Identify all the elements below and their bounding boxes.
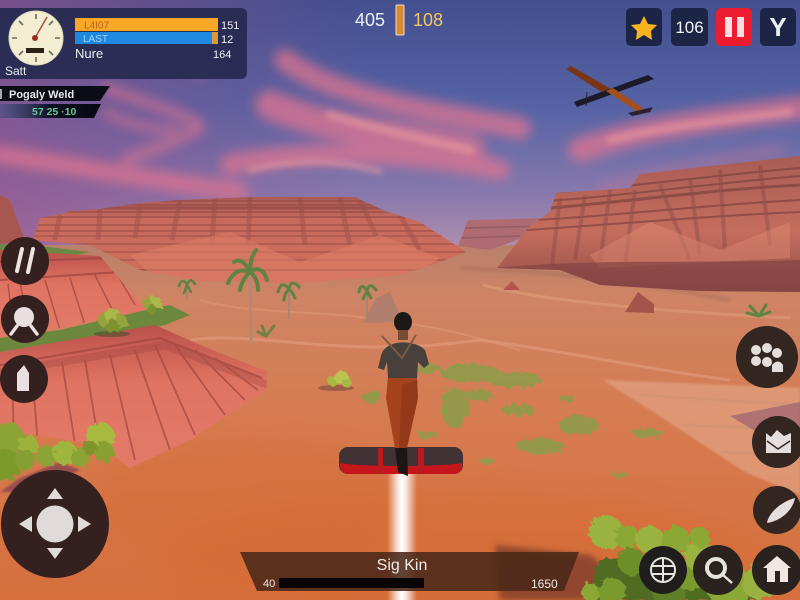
grass patches [362,363,663,478]
button: pause [716,8,752,46]
bottom progress bar: Sig Kin [377,557,427,574]
lower terrace [0,325,270,470]
top score: 405 [355,10,385,30]
banner: location: Pogaly Weld [9,89,74,101]
button: Y: Y [769,12,787,42]
bottom progress bar [240,552,579,591]
pad shadow [730,402,800,440]
bottom progress bar: 1650 [531,577,558,591]
distant mesa [458,218,547,250]
banner: location [0,86,110,101]
button: board [753,486,800,534]
right mesa [495,155,800,295]
button: home [752,545,800,595]
left cliff and upper terrace [0,195,150,340]
player character [378,312,429,476]
blue bar [75,32,233,46]
button: globe [639,546,687,594]
nure row: Nure [75,46,103,61]
button: 106 [671,8,708,46]
sky [0,0,800,270]
button: crown [752,416,800,468]
button: 106: 106 [675,18,704,37]
button: star [626,8,662,46]
bushes [0,297,354,492]
top score [355,5,443,35]
nure row [75,46,231,61]
jet trail [387,472,417,600]
button: bullet [0,355,48,403]
desert ground [0,245,800,600]
hoverboard [339,447,463,474]
huts and ruin [363,281,654,323]
gauge label: Satt [5,64,27,78]
button: search [693,545,743,595]
blue bar: 12 [221,34,233,46]
joystick [1,470,109,578]
tree shadow [495,545,650,600]
button: team [736,326,798,388]
banner: coordinates: 57 25 ·10 [32,106,77,118]
button: slashes [1,237,49,285]
button: Y [760,8,796,46]
orange bar [75,18,239,32]
palm trees [179,250,770,343]
button: scope [1,295,49,343]
bottom right bush [581,515,778,600]
green terrace [0,305,190,358]
banner: coordinates [0,104,101,118]
central mesa [30,195,470,285]
bottom progress bar: 40 [263,578,275,590]
status panel [0,8,247,79]
gauge [9,11,63,65]
top score: 108 [413,10,443,30]
airplane [566,66,654,116]
pink clouds [0,50,800,192]
concrete pad [603,380,800,495]
orange bar: 151 [221,20,239,32]
nure row: 164 [213,49,231,61]
blue bar: LAST [83,34,108,45]
orange bar: L4I07 [84,20,109,32]
